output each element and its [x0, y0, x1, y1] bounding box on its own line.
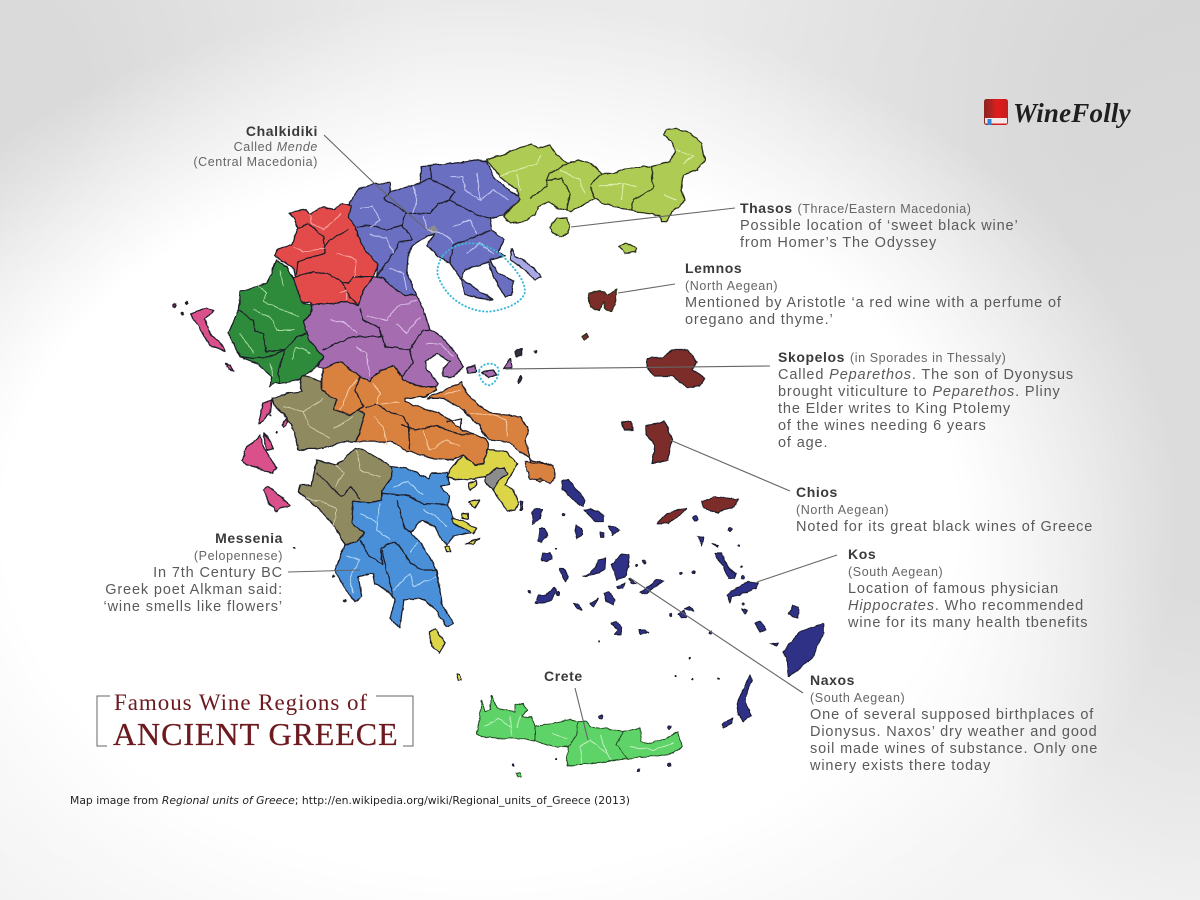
logo wordmark: WineFolly — [1013, 98, 1131, 128]
island: Karpathos — [737, 675, 752, 722]
region: Aetolia-Acarnania — [272, 375, 365, 450]
label: Naxos: winery exists there today — [810, 758, 991, 774]
northern mainland regions — [228, 160, 541, 387]
leader: Skopelos — [505, 366, 770, 369]
label: Naxos: soil made wines of substance. Only one — [810, 741, 1098, 757]
region: Crete — [477, 695, 682, 777]
label: Chios — [796, 484, 1093, 535]
label: Messenia: (Pelopennese) — [194, 549, 283, 563]
label: Skopelos: Called Peparethos. The son of Dyonysus — [778, 367, 1074, 383]
logo book icon — [984, 99, 1008, 125]
label: Lemnos: Mentioned by Aristotle ‘a red wine with a perfume of — [685, 295, 1062, 311]
label: Lemnos: oregano and thyme.’ — [685, 312, 834, 328]
label: Naxos: Naxos — [810, 672, 855, 688]
label: Thasos: Possible location of ‘sweet black wine’ — [740, 218, 1019, 234]
label: Skopelos: brought viticulture to Peparethos. Pliny — [778, 384, 1061, 400]
leader: Lemnos — [618, 284, 675, 293]
label: Skopelos: of age. — [778, 435, 828, 451]
label: Chalkidiki — [193, 123, 318, 169]
island: Thasos — [550, 218, 570, 237]
label: Messenia: In 7th Century BC — [153, 565, 283, 581]
leader lines — [288, 135, 837, 740]
region: Central Greece and Euboea — [322, 362, 555, 482]
region: Thrace and Eastern Macedonia — [487, 128, 705, 341]
region: Thessaly — [303, 277, 463, 387]
label: Lemnos — [685, 260, 1062, 328]
islands: Ikaria and Samos — [657, 497, 738, 523]
title line 2: ANCIENT GREECE — [113, 716, 399, 752]
label: Chalkidiki: Chalkidiki — [246, 123, 318, 139]
dotted highlight rings — [437, 243, 525, 385]
leader: Crete — [575, 688, 588, 740]
label: Messenia: Greek poet Alkman said: — [105, 582, 283, 598]
label: Kos: wine for its many health tbenefits — [848, 615, 1088, 631]
label: Thasos: from Homer’s The Odyssey — [740, 235, 937, 251]
leader: Chios — [670, 440, 790, 491]
map regions — [172, 128, 823, 777]
island: Lesbos — [647, 350, 705, 388]
leader: Thasos — [571, 208, 735, 227]
label: Skopelos — [778, 349, 1074, 451]
label: Chalkidiki: (Central Macedonia) — [193, 155, 318, 169]
label: Messenia: Messenia — [215, 530, 283, 546]
region: Western Macedonia — [275, 204, 378, 308]
label: Naxos: (South Aegean) — [810, 691, 905, 705]
Corfu and Sporades islands — [172, 301, 537, 383]
region: Western Peloponnese — [298, 448, 392, 545]
title bracket — [97, 696, 413, 746]
leader: Chalkidiki — [324, 135, 427, 230]
large north Aegean islands — [622, 350, 705, 464]
leader: Messenia — [288, 570, 360, 572]
label: Thasos — [740, 200, 1019, 251]
label: Skopelos: Skopelos (in Sporades in Thessaly) — [778, 349, 1006, 365]
label: Lemnos: Lemnos — [685, 260, 742, 276]
label: Lemnos: (North Aegean) — [685, 279, 778, 293]
source credit: Map image from Regional units of Greece; http://en.wikipedia.org/wiki/Regional_units_of_Greece (2013) — [70, 794, 630, 807]
label: Chios: Noted for its great black wines of Greece — [796, 519, 1093, 535]
southern mainland regions — [242, 362, 555, 653]
label: Kos: Kos — [848, 546, 876, 562]
region: Peloponnese east and south — [335, 467, 475, 628]
Cyclades — [528, 479, 695, 634]
label: Naxos: Dionysus. Naxos’ dry weather and good — [810, 724, 1098, 740]
label: Kos: Hippocrates. Who recommended — [848, 598, 1084, 614]
island: Rhodes — [783, 623, 823, 677]
label: Naxos: One of several supposed birthplaces of — [810, 707, 1094, 723]
region: Attica and Saronic islands — [430, 448, 518, 653]
label: Kos — [848, 546, 1088, 631]
leader: Kos — [757, 555, 837, 582]
island: Chios — [646, 422, 672, 464]
island: Skyros — [525, 462, 555, 483]
label: Skopelos: of the wines needing 6 years — [778, 418, 987, 434]
label: Naxos — [810, 672, 1098, 774]
label: Messenia — [104, 530, 283, 615]
island: Lemnos — [588, 288, 617, 312]
label: Thasos: Thasos (Thrace/Eastern Macedonia) — [740, 200, 972, 216]
label: Chios: (North Aegean) — [796, 503, 889, 517]
label: Messenia: ‘wine smells like flowers’ — [104, 599, 283, 615]
region: Central Macedonia and Chalkidiki — [345, 160, 541, 300]
Dodecanese — [512, 516, 823, 771]
island: Samothrace — [618, 243, 637, 253]
Aegean islands and Crete — [456, 462, 823, 777]
Ionian islands — [242, 400, 290, 512]
region: Epirus — [228, 260, 323, 387]
label: Kos: (South Aegean) — [848, 565, 943, 579]
leader: Naxos — [630, 578, 803, 693]
label: Kos: Location of famous physician — [848, 581, 1059, 597]
label: Crete: Crete — [544, 668, 583, 684]
label: Skopelos: the Elder writes to King Ptolemy — [778, 401, 1011, 417]
label: Chalkidiki: Called Mende — [234, 140, 318, 154]
title line 1: Famous Wine Regions of — [114, 690, 368, 715]
label: Chios: Chios — [796, 484, 838, 500]
